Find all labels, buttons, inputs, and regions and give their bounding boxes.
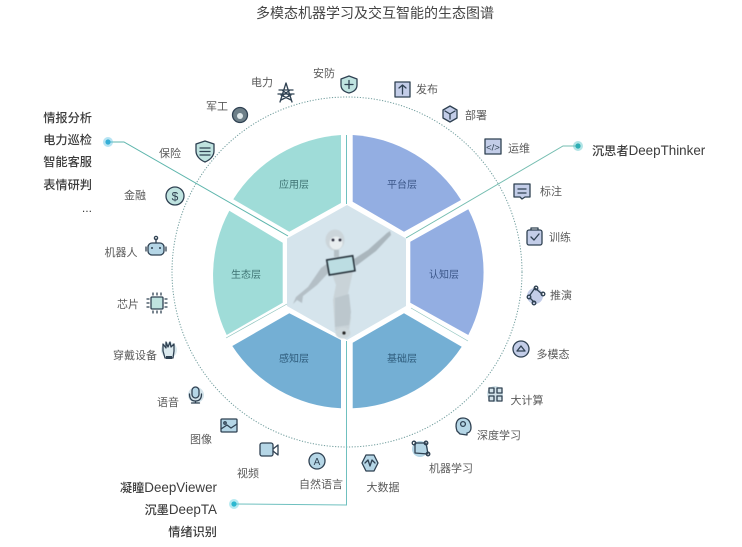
- item: 训练: [527, 228, 571, 245]
- item: 机器学习: 机器学习: [429, 461, 473, 475]
- segment: 平台层: [353, 135, 461, 232]
- connector: bottom callout line: [234, 135, 346, 505]
- segment: 认知层: [410, 209, 484, 335]
- connector: top-left callout line: [108, 142, 288, 236]
- segment: 应用层: 应用层: [279, 178, 309, 191]
- callout: left list: ...: [82, 201, 92, 215]
- item: 军工: [206, 100, 248, 122]
- item: 金融: 金融: [124, 188, 146, 202]
- item: 穿戴设备: 穿戴设备: [113, 348, 157, 362]
- item: 电力: [251, 76, 294, 102]
- item: 视频: 视频: [237, 466, 259, 480]
- dotted outer ring: [172, 97, 522, 447]
- item: 机器人: [104, 236, 166, 259]
- callout: left list: 智能客服: [43, 154, 92, 169]
- item: 语音: [157, 387, 204, 409]
- callout: left list: 情报分析: [43, 110, 92, 125]
- item: 安防: [313, 66, 357, 93]
- connector: thin gap lines: [226, 304, 468, 341]
- segment: 基础层: 基础层: [387, 352, 417, 365]
- item: 部署: [443, 106, 487, 122]
- item: 图像: [190, 419, 237, 446]
- segment: 生态层: [213, 211, 283, 335]
- item: 安防: 安防: [313, 66, 335, 80]
- item: 多模态: [513, 341, 570, 361]
- segment: 感知层: 感知层: [279, 352, 309, 365]
- item: 深度学习: [456, 418, 521, 442]
- callout dot: bottom: [229, 499, 239, 509]
- callout: bottom list: 沉墨DeepTA: [144, 502, 217, 517]
- segment: 认知层: 认知层: [429, 268, 459, 281]
- item: 训练: 训练: [549, 230, 571, 244]
- callout: right label: 沉思者DeepThinker: [592, 143, 706, 158]
- item: 自然语言: A: [314, 457, 321, 468]
- item: 自然语言: 自然语言: [299, 477, 343, 491]
- item: 推演: 推演: [550, 288, 572, 302]
- item: 电力: 电力: [251, 76, 273, 89]
- item: 运维: [485, 139, 530, 155]
- item: 穿戴设备: [113, 342, 177, 362]
- item: 芯片: [117, 293, 167, 313]
- segment: 感知层: [232, 313, 341, 408]
- item: 大计算: [487, 386, 544, 407]
- title: 多模态机器学习及交互智能的生态图谱: [256, 5, 494, 21]
- item: 大计算: 大计算: [510, 393, 544, 407]
- callout: left list: 电力巡检: [43, 132, 92, 147]
- callout: bottom list: 情绪识别: [168, 524, 217, 539]
- callout: left list: 表情研判: [43, 177, 92, 192]
- item: 机器学习: [412, 441, 473, 475]
- segment: 应用层: [233, 135, 341, 232]
- item: 金融: [124, 187, 184, 205]
- item: 运维: 运维: [508, 142, 530, 155]
- callout dot: left: [103, 137, 113, 147]
- item: 发布: 发布: [416, 82, 438, 96]
- callout: bottom list: [120, 480, 218, 539]
- item: 多模态: 多模态: [536, 347, 570, 361]
- item: 保险: 保险: [159, 146, 181, 160]
- callout: bottom list: 凝瞳DeepViewer: [120, 480, 218, 495]
- item: 自然语言: [299, 453, 343, 491]
- item: 发布: [395, 82, 438, 97]
- item: 军工: 军工: [206, 100, 228, 113]
- item: 运维: </>: [486, 142, 500, 154]
- segment: 基础层: [353, 313, 462, 408]
- segment: 平台层: 平台层: [387, 178, 417, 191]
- item: 标注: [514, 184, 562, 199]
- item: 大数据: 大数据: [366, 480, 400, 494]
- item: 保险: [159, 141, 214, 162]
- hexagon wheel: [213, 135, 484, 408]
- item: 视频: [237, 443, 278, 480]
- item: 机器人: 机器人: [104, 245, 138, 259]
- item: 金融: $: [172, 190, 179, 204]
- center hexagon: [287, 205, 406, 340]
- segment: 生态层: 生态层: [231, 268, 261, 281]
- item: 标注: 标注: [540, 184, 562, 198]
- item: 大数据: [362, 455, 400, 494]
- callout: left list: [43, 110, 92, 215]
- item: 图像: 图像: [190, 433, 212, 446]
- connector: right callout line: [406, 146, 578, 238]
- item: 语音: 语音: [157, 395, 179, 409]
- robot: [293, 230, 391, 338]
- item: 深度学习: 深度学习: [477, 428, 521, 442]
- item: 部署: 部署: [465, 108, 487, 122]
- callout dot: right: [573, 141, 583, 151]
- item: 推演: [527, 286, 572, 305]
- item: 芯片: 芯片: [117, 297, 139, 311]
